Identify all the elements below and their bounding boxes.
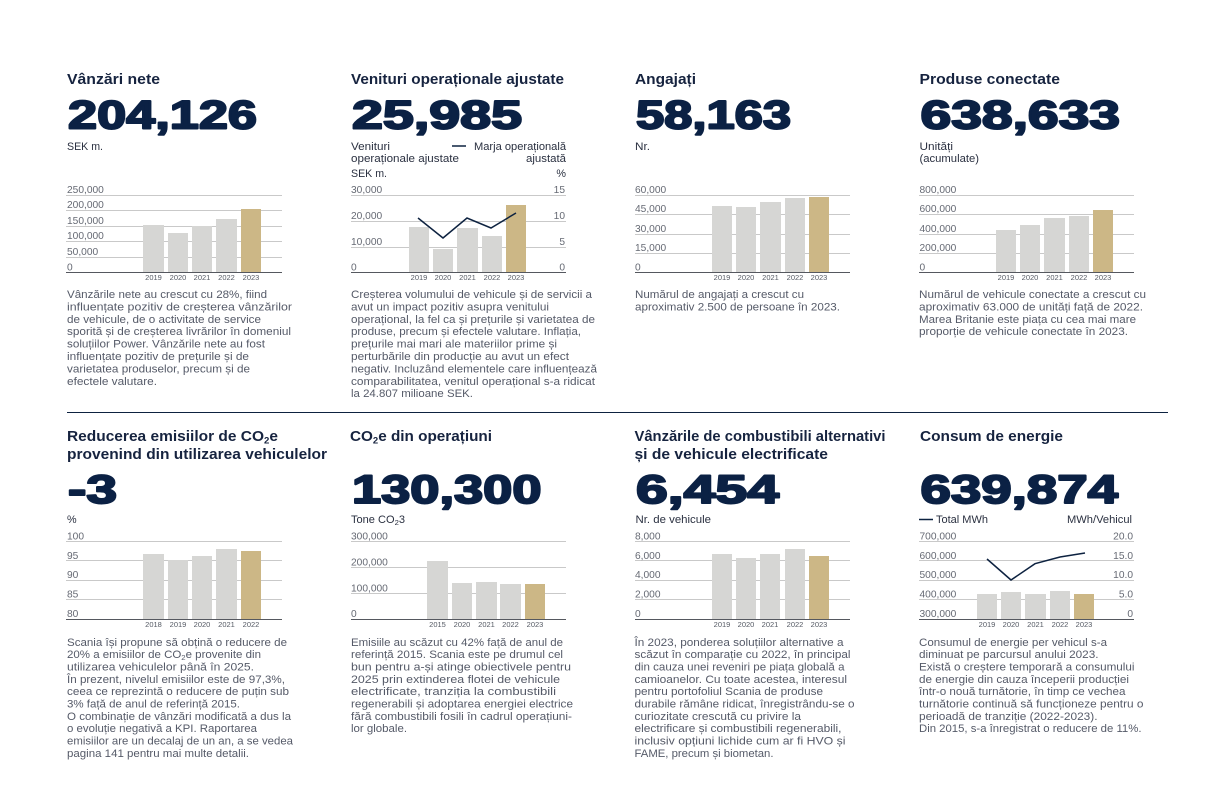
body text: inclusiv opțiuni lichide cum ar fi HVO și (634, 735, 846, 747)
combo chart: 2021 (1027, 620, 1044, 629)
bar chart: 2022 (1071, 273, 1087, 282)
bar chart: 50,000 (67, 247, 98, 258)
bar chart: 2022 (218, 273, 235, 282)
bar chart: 0 (635, 609, 641, 620)
body text (633, 636, 854, 760)
body text: aproximativ 63.000 de unități față de 2022. (919, 301, 1143, 313)
bar chart: 80 (67, 609, 79, 620)
combo chart: 10 (554, 211, 565, 222)
bar chart: 2021 (1046, 273, 1063, 282)
bar chart: 2,000 (635, 590, 661, 600)
bar chart (919, 185, 1134, 282)
body text: 2 (181, 653, 186, 662)
bar chart: 2022 (502, 620, 519, 629)
combo chart: 2020 (435, 273, 451, 282)
body text: negativ. Incluzând elementele care influențează (351, 363, 598, 375)
bar chart: 2021 (218, 620, 235, 629)
body text: electrificare și combustibili regenerabili, (634, 723, 842, 735)
chart legend (919, 514, 1132, 526)
chart legend: SEK m. (351, 168, 387, 180)
combo chart: 20,000 (351, 211, 382, 222)
body text: din cauza unei reveniri pe piața globală a (634, 661, 845, 673)
bar chart: 2022 (787, 620, 803, 629)
body text: într-o nouă turnătorie, în timp ce vechea (918, 686, 1126, 698)
body text: ceea ce reprezintă o reducere de puțin sub (67, 686, 289, 698)
combo chart: 0 (559, 262, 565, 274)
bar chart: 2021 (762, 273, 779, 282)
big number: 58,163 (636, 94, 791, 138)
bar chart: 2019 (170, 620, 186, 629)
bar chart: 400,000 (920, 224, 957, 235)
body text: În prezent, nivelul emisiilor este de 97,3%, (66, 673, 285, 686)
heading: 2 (264, 436, 269, 446)
combo chart: 400,000 (920, 590, 957, 600)
combo chart: 15 (554, 185, 565, 196)
combo chart: 5.0 (1119, 590, 1133, 600)
chart legend: MWh/Vehicul (1067, 514, 1132, 526)
bar chart: 800,000 (920, 185, 957, 196)
body text: o evoluție negativă a KPI. Raportarea (67, 723, 258, 735)
combo chart: 2020 (1003, 620, 1019, 629)
chart legend: Venituri (351, 141, 390, 153)
panel: Consum de energie (918, 429, 1144, 735)
body text: varietatea produselor, precum și de (67, 363, 250, 375)
bar chart: 2019 (145, 273, 162, 282)
heading: provenind din utilizarea vehiculelor (67, 447, 327, 463)
big number: 204,126 (68, 94, 257, 138)
body text (351, 289, 598, 400)
bar chart: 2022 (787, 273, 803, 282)
body text: de energie din cauza începerii producției (919, 674, 1129, 686)
body text: FAME, precum și biometan. (634, 748, 774, 760)
bar chart: 2019 (998, 273, 1014, 282)
big number: 25,985 (352, 94, 522, 138)
bar chart: 200,000 (920, 243, 957, 254)
body text: În 2023, ponderea soluțiilor alternative a (633, 636, 844, 649)
heading: e din operațiuni (378, 429, 492, 445)
bar chart: 85 (67, 590, 79, 600)
bar chart (635, 185, 850, 282)
body text: Consumul de energie per vehicul s-a (919, 637, 1108, 649)
bar chart (66, 532, 282, 629)
bar chart: 0 (67, 262, 73, 274)
bar chart: 2020 (738, 620, 754, 629)
heading: CO (350, 429, 372, 445)
combo chart: 10,000 (351, 237, 382, 248)
bar chart: 2020 (1022, 273, 1038, 282)
heading: Consum de energie (920, 429, 1063, 445)
chart legend: operaționale ajustate (351, 153, 459, 165)
unit label: 3 (399, 514, 405, 526)
combo chart: 15.0 (1113, 551, 1133, 562)
combo chart: 5 (559, 237, 565, 248)
body text: influențate pozitiv de creșterea vânzărilor (67, 301, 292, 313)
body text: Marea Britanie este piața cu cea mai mare (919, 314, 1136, 326)
unit label: SEK m. (67, 141, 103, 153)
body text: diminuat pe parcursul anului 2023. (919, 649, 1098, 661)
body text: Emisiile au scăzut cu 42% față de anul de (351, 637, 563, 649)
body text: curiozitate crescută cu privire la (634, 711, 802, 723)
bar chart (66, 185, 282, 282)
body text: influențate pozitiv de prețurile și de (67, 351, 249, 363)
heading: Venituri operaționale ajustate (351, 72, 564, 88)
panel: Angajați (635, 72, 850, 313)
heading: Vânzările de combustibili alternativi (634, 429, 886, 445)
bar chart: 2018 (145, 620, 162, 629)
combo chart: 2019 (979, 620, 995, 629)
big number: 130,300 (352, 468, 542, 512)
bar chart: 2019 (714, 273, 730, 282)
heading: Reducerea emisiilor de CO (67, 429, 252, 445)
bar chart: 2020 (454, 620, 470, 629)
chart legend: Total MWh (936, 514, 988, 526)
combo chart (351, 185, 566, 282)
heading (634, 429, 886, 463)
bar chart: 200,000 (67, 200, 104, 211)
body text: Vânzările nete au crescut cu 28%, fiind (67, 289, 267, 301)
unit label: (acumulate) (920, 153, 979, 165)
body text: regenerabili și adoptarea energiei electrice (351, 699, 573, 711)
heading: e (269, 429, 278, 445)
panel: Produse conectate (919, 72, 1146, 338)
combo chart: 2022 (1052, 620, 1068, 629)
heading: 2 (373, 436, 378, 446)
panel: Vânzările de combustibili alternativi (633, 429, 886, 760)
body text: prețurile mai mari ale materiilor prime și (351, 339, 557, 351)
bar chart: 2019 (714, 620, 730, 629)
body text: de vehicule, de o activitate de service (67, 314, 261, 326)
body text: durabile rămâne ridicat, înregistrându-se o (634, 699, 854, 711)
chart legend (351, 141, 566, 180)
combo chart (919, 532, 1134, 629)
bar chart: 0 (635, 262, 641, 274)
bar chart: 2022 (243, 620, 259, 629)
bar chart: 300,000 (351, 532, 388, 542)
body text: aproximativ 2.500 de persoane în 2023. (635, 301, 840, 313)
combo chart: 20.0 (1113, 532, 1133, 542)
combo chart: 300,000 (920, 609, 957, 620)
heading: Vânzări nete (67, 72, 160, 88)
body text: Numărul de angajați a crescut cu (635, 289, 804, 301)
combo chart: 10.0 (1113, 570, 1133, 581)
body text: e provenite din (186, 649, 261, 661)
body text: camioanelor. Cu toate acestea, interesul (634, 674, 847, 686)
big number: -3 (68, 468, 117, 512)
body text: fără combustibili fosili în cadrul operațiuni- (351, 711, 572, 723)
bar chart: 100 (67, 532, 84, 542)
bar chart: 0 (920, 262, 926, 274)
unit label: Nr. (635, 141, 650, 153)
bar chart: 2021 (194, 273, 210, 282)
body text: operațional, la fel ca și prețurile și varietatea de (351, 314, 595, 326)
bar chart: 600,000 (920, 204, 957, 215)
bar chart: 8,000 (635, 532, 661, 542)
body text: Din 2015, s-a înregistrat o reducere de 11%. (919, 723, 1142, 735)
combo chart: 700,000 (920, 532, 957, 542)
body text: efectele valutare. (67, 376, 157, 388)
bar chart: 90 (67, 570, 79, 581)
body text (351, 637, 573, 735)
unit label: 2 (395, 518, 399, 527)
body text: 2025 prin extinderea flotei de vehicule (351, 674, 560, 686)
body text: Există o creștere temporară a consumului (919, 661, 1134, 673)
bar chart: 100,000 (67, 231, 104, 242)
bar chart: 200,000 (351, 558, 388, 568)
big number: 638,633 (920, 94, 1120, 138)
unit label: Nr. de vehicule (636, 514, 711, 526)
bar chart (351, 532, 566, 629)
heading: Angajați (635, 72, 696, 88)
body text: Scania își propune să obțină o reducere de (67, 637, 287, 649)
big number: 6,454 (636, 468, 780, 512)
bar chart: 2021 (762, 620, 778, 629)
bar chart: 2023 (811, 620, 827, 629)
body text: emisiilor are un decalaj de un an, a se vedea (67, 735, 294, 747)
big number: 639,874 (920, 468, 1119, 512)
unit label: Unități (920, 141, 953, 153)
body text (919, 289, 1146, 338)
bar chart: 2023 (527, 620, 543, 629)
combo chart: 2019 (411, 273, 427, 282)
bar chart: 2023 (811, 273, 827, 282)
panel: Vânzări nete (66, 72, 292, 388)
bar chart: 6,000 (635, 551, 661, 562)
bar chart: 2020 (170, 273, 186, 282)
heading (67, 429, 327, 463)
body text: bun pentru a-și atinge obiectivele pentru (351, 661, 571, 673)
bar chart: 2020 (194, 620, 210, 629)
body text (66, 637, 294, 760)
chart legend: % (556, 168, 566, 180)
bar chart: 250,000 (67, 185, 104, 196)
bar chart: 2023 (243, 273, 259, 282)
panel: Venituri operaționale ajustate (351, 72, 598, 400)
chart legend: ajustată (526, 153, 566, 165)
panel: CO2e din operațiuni (350, 429, 573, 735)
bar chart: 0 (351, 609, 357, 620)
body text: pagina 141 pentru mai multe detalii. (67, 748, 249, 760)
body text: perturbările din producție au avut un efect (351, 351, 570, 363)
unit label (920, 141, 979, 165)
body text: Numărul de vehicule conectate a crescut cu (919, 289, 1146, 301)
unit label: Tone CO (351, 514, 394, 526)
bar chart: 2020 (738, 273, 754, 282)
body text: avut un impact pozitiv asupra venitului (351, 301, 549, 313)
chart legend: Marja operațională (474, 141, 566, 153)
bar chart: 100,000 (351, 584, 388, 594)
combo chart: 2022 (484, 273, 500, 282)
combo chart: 600,000 (920, 551, 957, 562)
bar chart: 30,000 (635, 224, 666, 235)
body text: la 24.807 milioane SEK. (351, 388, 473, 400)
body text: pentru portofoliul Scania de produse (634, 686, 823, 698)
bar chart: 60,000 (635, 185, 666, 196)
body text: produse, precum și efectele valutare. Inflația, (351, 326, 581, 338)
combo chart: 2023 (1076, 620, 1092, 629)
body text: turnătorie continuă să funcționeze pentru o (919, 699, 1144, 711)
body text: sporită și de creșterea livrărilor în domeniul (67, 326, 291, 338)
body text: 3% față de anul de referință 2015. (67, 699, 240, 711)
body text: comparabilitatea, venitul operațional s-a ridicat (351, 376, 596, 388)
body text: lor globale. (351, 723, 407, 735)
body text: proporție de vehicule conectate în 2023. (919, 326, 1128, 338)
bar chart: 15,000 (635, 243, 666, 254)
bar chart: 150,000 (67, 216, 104, 227)
bar chart: 4,000 (635, 570, 661, 581)
body text: 20% a emisiilor de CO (67, 649, 178, 661)
body text: perioadă de tranziție (2022-2023). (919, 711, 1098, 723)
bar chart: 2015 (429, 620, 446, 629)
heading: Produse conectate (920, 72, 1060, 88)
body text: electrificate, tranziția la combustibili (351, 686, 556, 698)
body text: scăzut în comparație cu 2022, în principal (634, 649, 850, 661)
combo chart: 500,000 (920, 570, 957, 581)
combo chart: 30,000 (351, 185, 382, 196)
bar chart: 45,000 (635, 204, 666, 215)
body text (67, 289, 292, 388)
unit label: % (67, 514, 77, 526)
bar chart (635, 532, 850, 629)
bar chart: 2021 (478, 620, 495, 629)
body text: utilizarea vehiculelor până în 2025. (67, 661, 254, 673)
body text (635, 289, 840, 313)
combo chart: 0 (1127, 609, 1133, 620)
bar chart: 95 (67, 551, 79, 562)
bar chart: 2023 (1095, 273, 1111, 282)
heading: și de vehicule electrificate (634, 447, 828, 463)
body text: O combinație de vânzări modificată a dus la (67, 711, 292, 723)
combo chart: 2021 (459, 273, 476, 282)
body text: Creșterea volumului de vehicule și de servicii a (351, 289, 593, 301)
body text: referință 2015. Scania este pe drumul cel (351, 649, 563, 661)
combo chart: 0 (351, 262, 357, 274)
combo chart: 2023 (508, 273, 524, 282)
body text (918, 637, 1144, 735)
panel: Reducerea emisiilor de CO2e (66, 429, 327, 760)
body text: soluțiilor Power. Vânzările nete au fost (67, 339, 266, 351)
